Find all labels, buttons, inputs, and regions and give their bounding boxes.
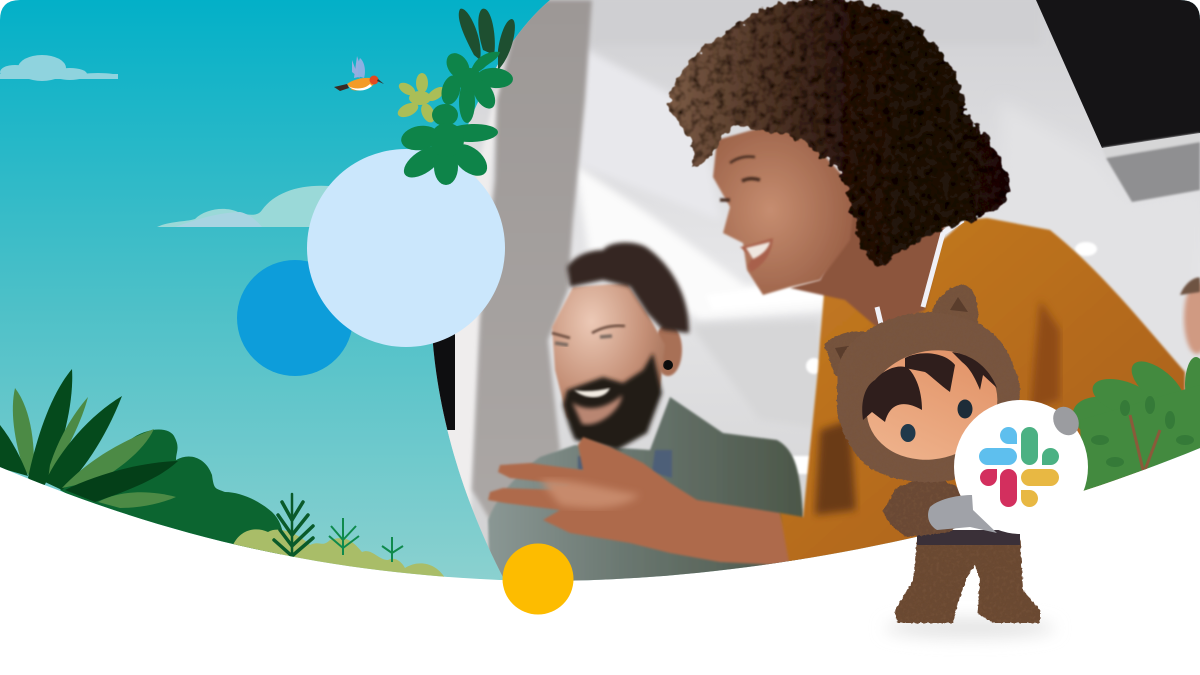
- woman: [668, 0, 1185, 567]
- astro: glove top: [1048, 402, 1084, 440]
- man: ear: [654, 324, 682, 376]
- plant: lower green leaf: [399, 104, 498, 185]
- circle: pale blue: [307, 149, 505, 347]
- astro: ears: [824, 285, 978, 385]
- man: [488, 242, 803, 590]
- astro: face: [855, 337, 1009, 473]
- plant: upper green leaf: [438, 49, 514, 123]
- man: face: [551, 283, 665, 420]
- dark ceiling panel: [1036, 0, 1200, 148]
- astro: waist: [917, 530, 1020, 545]
- woman: jacket shadow right: [1030, 300, 1060, 410]
- white strip beside pillar: [440, 64, 504, 508]
- man: undershirt: [578, 450, 672, 478]
- bush: olive low: [233, 529, 445, 578]
- fern: dark: [274, 494, 313, 556]
- man: brows and eyes: [552, 326, 625, 345]
- hummingbird: [334, 56, 384, 91]
- man: hair: [567, 242, 689, 333]
- slack badge: [954, 400, 1088, 534]
- woman: jacket: [780, 218, 1185, 567]
- man: hand and arm: [488, 437, 800, 566]
- air vent: [1102, 133, 1200, 202]
- astro: shadow: [885, 618, 1055, 638]
- astro: ear inner right: [950, 297, 968, 312]
- woman: teeth: [746, 242, 770, 259]
- woman: jacket shadow left: [815, 420, 856, 515]
- astro: glove bottom: [928, 495, 997, 533]
- woman: neck: [790, 215, 945, 330]
- circle: yellow: [502, 544, 574, 614]
- right wall: [1000, 100, 1200, 380]
- man: smile: [574, 388, 610, 397]
- plant: yellow flower: [395, 73, 447, 125]
- astro: eyes: [900, 424, 916, 442]
- ceiling lamps: [792, 242, 1097, 474]
- astro: ear inner: [835, 345, 855, 368]
- dark monitor edge: [430, 334, 455, 430]
- bright window: [581, 51, 714, 210]
- astro: legs: [895, 537, 1040, 623]
- circle: medium blue: [237, 260, 353, 376]
- man: beard: [563, 353, 662, 450]
- background person: [1184, 282, 1200, 354]
- astro: hood: [837, 312, 1020, 482]
- astro: body and arm: [883, 475, 975, 537]
- office background: [420, 0, 1200, 600]
- woman: eyes and brow: [720, 157, 760, 200]
- cloud: middle: [157, 186, 330, 227]
- woman: face: [713, 125, 856, 295]
- slack logo: [979, 427, 1059, 507]
- light strip: [706, 280, 825, 310]
- man: earring: [663, 360, 673, 370]
- ceiling band: [590, 0, 1040, 45]
- plant: large spiky leaves: [0, 369, 178, 508]
- photo: [420, 0, 1200, 600]
- man: finger highlight: [540, 480, 640, 508]
- plant: tall dark leaves: [459, 9, 515, 70]
- woman: necklace strap: [877, 220, 963, 328]
- man: shirt: [488, 397, 803, 590]
- concrete pillar: [472, 0, 592, 520]
- plant: right leaves: [1068, 353, 1200, 500]
- cloud: top left: [0, 55, 118, 81]
- astro: hair: [862, 352, 997, 422]
- astro mascot: [824, 285, 1088, 638]
- woman: afro hair: [668, 0, 1011, 267]
- man: chin skin: [572, 395, 622, 425]
- fern: small: [382, 537, 403, 562]
- woman: lips: [740, 238, 773, 272]
- fern: green: [329, 518, 359, 555]
- bush: dark green: [60, 430, 283, 560]
